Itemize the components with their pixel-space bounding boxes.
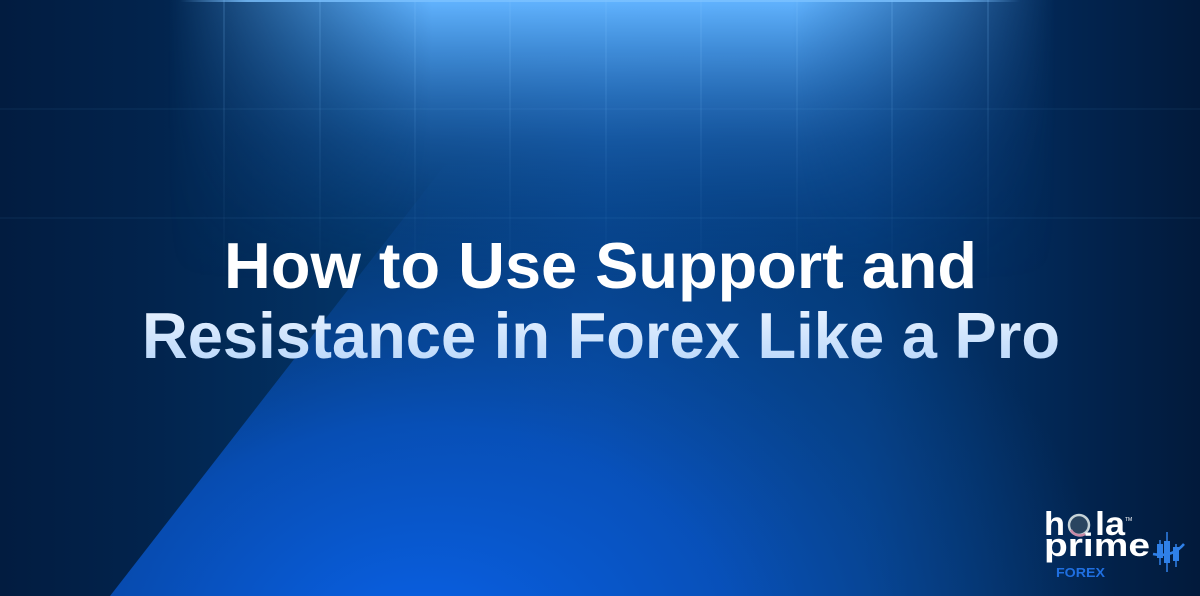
icon: bubble letter o: [1069, 515, 1089, 535]
title: [142, 229, 1060, 372]
logo trademark: TM: [1125, 517, 1132, 523]
logo: hola prime forex: [1044, 505, 1184, 580]
logo word: hola: h: [1044, 505, 1065, 542]
top glow: [182, 0, 1042, 224]
title line 1: How to Use Support and: [224, 229, 977, 302]
logo word: forex: FOREX: [1056, 565, 1105, 580]
diagonal light wedge: [110, 165, 1150, 596]
icon: candlesticks with arrow: [1153, 532, 1184, 572]
logo word: hola: [1044, 505, 1126, 542]
logo word: prime: prime: [1044, 527, 1150, 563]
logo word: hola: la: [1095, 505, 1126, 542]
title line 2: Resistance in Forex Like a Pro: [142, 299, 1060, 372]
